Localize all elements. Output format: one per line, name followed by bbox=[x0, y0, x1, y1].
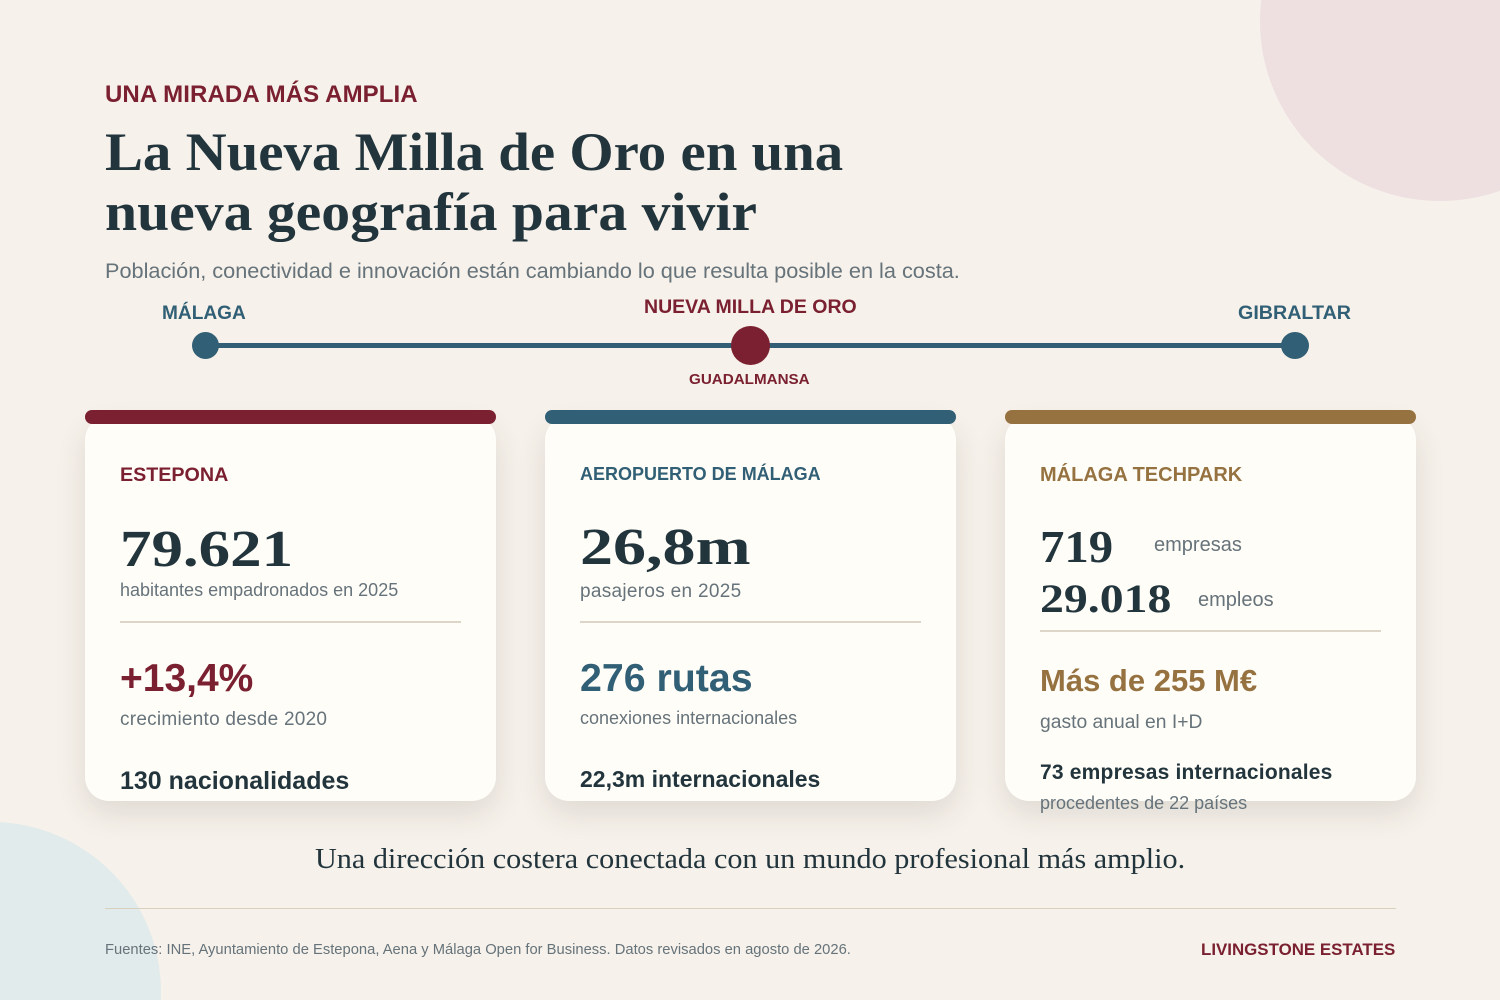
title: nueva geografía para vivir bbox=[105, 182, 757, 242]
card accent: Aeropuerto bbox=[545, 410, 956, 424]
stop: Gibraltar bbox=[1238, 302, 1351, 359]
stat: growth: +13,4% bbox=[120, 657, 253, 700]
stat: routes: 276 rutas bbox=[580, 656, 753, 700]
panel: Techpark bbox=[1005, 416, 1416, 801]
eyebrow: UNA MIRADA MÁS AMPLIA bbox=[105, 81, 418, 108]
panel heading: Techpark: MÁLAGA TECHPARK bbox=[1040, 464, 1242, 486]
panel heading: Estepona: ESTEPONA bbox=[120, 464, 228, 486]
label: routes: conexiones internacionales bbox=[580, 708, 797, 728]
subtitle: Población, conectividad e innovación están cambiando lo que resulta posible en la costa. bbox=[105, 258, 960, 283]
decorative circle: bottom left bbox=[0, 822, 161, 1000]
sources: Fuentes: INE, Ayuntamiento de Estepona, Aena y Málaga Open for Business. Datos revisados en agosto de 2026. bbox=[105, 942, 851, 958]
label: growth: crecimiento desde 2020 bbox=[120, 709, 327, 730]
card accent: Techpark bbox=[1005, 410, 1416, 424]
stop: Málaga bbox=[162, 302, 246, 359]
stat: companies: 719 bbox=[1040, 521, 1113, 572]
stat: international passengers: 22,3m internacionales bbox=[580, 766, 820, 792]
label: jobs: empleos bbox=[1198, 589, 1274, 611]
panel heading: Aeropuerto: AEROPUERTO DE MÁLAGA bbox=[580, 464, 821, 484]
stop: Nueva Milla de Oro: NUEVA MILLA DE ORO bbox=[644, 296, 857, 318]
title bbox=[105, 122, 843, 242]
stop: Málaga: MÁLAGA bbox=[162, 303, 246, 324]
label: population: habitantes empadronados en 2025 bbox=[120, 580, 398, 600]
brand: LIVINGSTONE ESTATES bbox=[1201, 940, 1395, 959]
label: passengers: pasajeros en 2025 bbox=[580, 581, 741, 602]
label: R&D: gasto anual en I+D bbox=[1040, 712, 1202, 733]
card accent: Estepona bbox=[85, 410, 496, 424]
stop: Nueva Milla de Oro: GUADALMANSA bbox=[689, 371, 810, 388]
stat: population: 79.621 bbox=[120, 521, 293, 578]
stat: jobs: 29.018 bbox=[1040, 576, 1171, 621]
panel: Aeropuerto bbox=[545, 416, 956, 801]
stat: passengers: 26,8m bbox=[580, 519, 751, 576]
route line bbox=[205, 343, 1295, 348]
panel: Estepona bbox=[85, 416, 496, 801]
stop: Gibraltar: GIBRALTAR bbox=[1238, 302, 1351, 324]
title: La Nueva Milla de Oro en una bbox=[105, 122, 843, 182]
route timeline bbox=[162, 296, 1351, 388]
label: companies: empresas bbox=[1154, 534, 1242, 556]
stat: R&D: Más de 255 M€ bbox=[1040, 663, 1257, 698]
label: countries: procedentes de 22 países bbox=[1040, 793, 1247, 813]
stat: nationalities: 130 nacionalidades bbox=[120, 767, 349, 795]
decorative circle: top right bbox=[1260, 0, 1500, 201]
closing statement: Una dirección costera conectada con un mundo profesional más amplio. bbox=[315, 843, 1185, 875]
stop: Nueva Milla de Oro bbox=[644, 296, 857, 388]
stat: international companies: 73 empresas internacionales bbox=[1040, 761, 1333, 784]
